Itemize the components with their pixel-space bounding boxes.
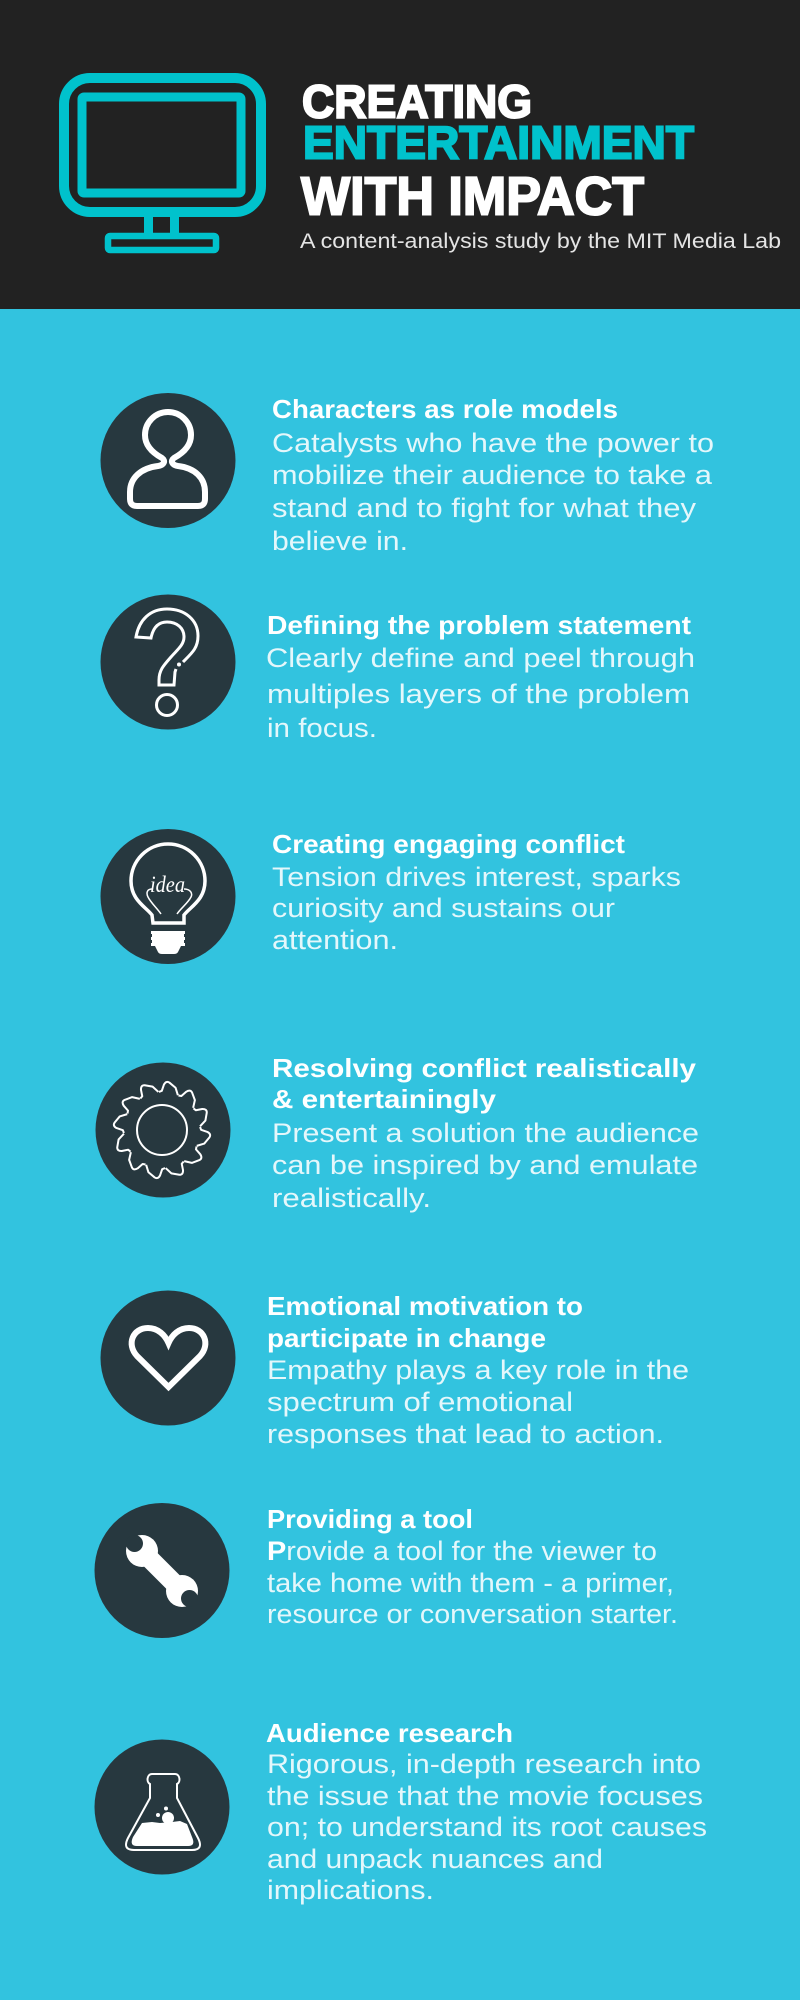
heading: Providing a tool	[267, 1504, 473, 1534]
body text: on; to understand its root causes	[267, 1812, 707, 1842]
body text: Rigorous, in-depth research into	[267, 1749, 701, 1779]
body text	[267, 1749, 707, 1905]
body text: stand and to fight for what they	[272, 493, 697, 523]
body text: the issue that the movie focuses	[267, 1781, 703, 1811]
panel: characters as role models	[100, 393, 714, 556]
body text: implications.	[267, 1875, 434, 1905]
panel: resolving conflict	[96, 1053, 699, 1213]
body text: in focus.	[267, 713, 377, 743]
heading: & entertainingly	[272, 1084, 497, 1114]
body text: Empathy plays a key role in the	[267, 1355, 689, 1385]
icon: question mark	[100, 594, 236, 730]
body text: can be inspired by and emulate	[272, 1150, 698, 1180]
subtitle: A content-analysis study by the MIT Media Lab	[300, 230, 781, 253]
title: WITH IMPACT	[301, 166, 644, 226]
panel: creating engaging conflict	[100, 829, 681, 964]
body text: multiples layers of the problem	[267, 679, 690, 709]
icon: light bulb with idea: idea	[150, 872, 185, 897]
heading: participate in change	[267, 1323, 546, 1353]
heading: Creating engaging conflict	[272, 829, 625, 859]
body text	[266, 643, 695, 743]
body text	[272, 428, 714, 556]
body text	[267, 1536, 678, 1629]
heading	[267, 1291, 583, 1353]
body text: and unpack nuances and	[267, 1844, 603, 1874]
panel: providing a tool	[94, 1503, 678, 1638]
panel: audience research	[94, 1718, 707, 1905]
body text: responses that lead to action.	[267, 1419, 664, 1449]
icon: computer monitor	[64, 78, 261, 250]
body text: Catalysts who have the power to	[272, 428, 714, 458]
panel: emotional motivation	[100, 1290, 689, 1449]
icon: gear	[96, 1062, 230, 1198]
body text: curiosity and sustains our	[272, 893, 615, 923]
icon: heart	[100, 1290, 236, 1426]
body text: take home with them - a primer,	[267, 1568, 674, 1598]
title	[301, 76, 694, 226]
icon: light bulb with idea	[100, 829, 236, 964]
body text: mobilize their audience to take a	[272, 460, 713, 490]
body text: Clearly define and peel through	[266, 643, 695, 673]
icon: flask	[94, 1740, 230, 1874]
icon: person	[100, 393, 236, 528]
heading: Emotional motivation to	[267, 1291, 583, 1321]
heading: Defining the problem statement	[267, 610, 691, 640]
title: CREATING	[302, 76, 532, 128]
heading: Characters as role models	[272, 394, 618, 424]
icon: wrench	[94, 1503, 230, 1638]
body text	[267, 1355, 689, 1449]
body text: resource or conversation starter.	[267, 1599, 678, 1629]
body text: spectrum of emotional	[267, 1387, 573, 1417]
heading	[272, 1053, 697, 1114]
body text	[272, 1118, 699, 1213]
body text	[272, 862, 681, 955]
body text: Provide a tool for the viewer to	[267, 1536, 657, 1566]
body text: realistically.	[272, 1183, 431, 1213]
body text: Tension drives interest, sparks	[272, 862, 681, 892]
title: ENTERTAINMENT	[303, 116, 694, 168]
body text: believe in.	[272, 526, 408, 556]
body text: attention.	[272, 925, 398, 955]
panel: defining the problem statement	[100, 594, 695, 743]
header panel	[0, 0, 800, 309]
heading: Resolving conflict realistically	[272, 1053, 697, 1083]
body text: Present a solution the audience	[272, 1118, 699, 1148]
heading: Audience research	[266, 1718, 513, 1748]
